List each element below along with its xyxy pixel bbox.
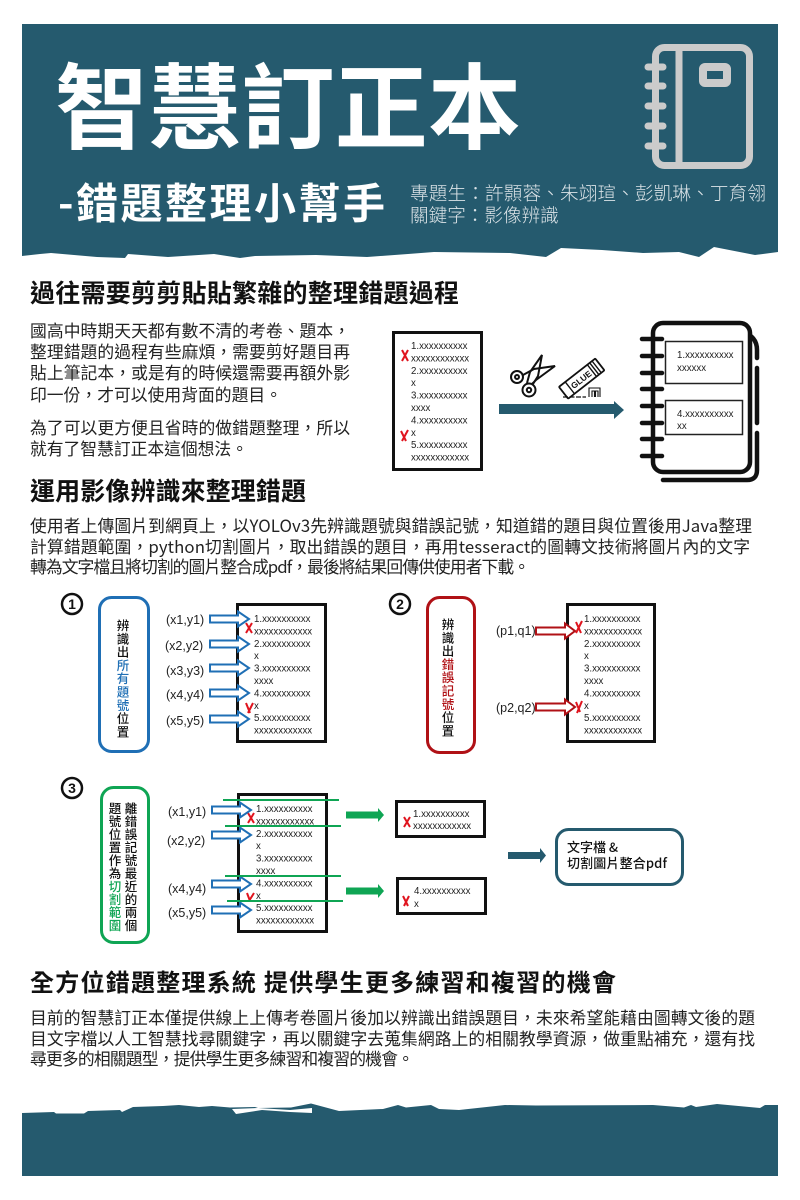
exam paper: 4.xxxxxxxxxx xyxy=(411,415,468,426)
text block: past process: 為了可以更方便且省時的做錯題整理，所以 xyxy=(30,415,350,439)
exam paper: xxxxxxxxxxxx xyxy=(584,726,642,737)
exam paper xyxy=(238,604,326,742)
text block: past process xyxy=(30,318,350,460)
exam paper: xxxxxxxxxxxx xyxy=(584,626,642,637)
exam paper: 1.xxxxxxxxxx xyxy=(254,614,311,625)
exam paper: x xyxy=(584,651,589,662)
text block: past process: 國高中時期天天都有數不清的考卷、題本， xyxy=(30,318,350,342)
label box: cropping range: 個 xyxy=(125,915,137,934)
step number 3 xyxy=(62,778,82,798)
label box: cropping range: 位 xyxy=(109,824,121,843)
step 2 xyxy=(390,594,654,752)
exam paper: 4.xxxxxxxxxx xyxy=(256,878,313,889)
label box: all question numbers: 識 xyxy=(117,628,129,647)
label box: cropping range: 置 xyxy=(109,837,121,856)
label box: cropping range: 離 xyxy=(125,798,138,817)
label box: cropping range: 題 xyxy=(109,798,122,817)
label box: error marks: 識 xyxy=(442,627,454,646)
label box: all question numbers: 所 xyxy=(117,655,130,674)
label box: all question numbers: 辨 xyxy=(117,615,130,634)
label box: all question numbers: 有 xyxy=(117,668,129,687)
exam paper: x xyxy=(256,891,261,902)
subtitle: -錯題整理小幫手 xyxy=(58,170,385,232)
icon: scissors xyxy=(511,355,555,396)
label box: cropping range: 作 xyxy=(109,850,122,869)
coordinate labels: (p2,q2) xyxy=(496,701,536,715)
green arrows xyxy=(346,808,384,898)
label box: all question numbers: 置 xyxy=(117,721,129,740)
coordinate labels: (x5,y5) xyxy=(166,714,204,728)
exam paper: 3.xxxxxxxxxx xyxy=(411,391,468,402)
cropped question 4 xyxy=(398,878,486,914)
label box: cropping range xyxy=(102,788,148,942)
heading: full system: 全方位錯題整理系統 提供學生更多練習和複習的機會 xyxy=(30,963,616,998)
exam paper: 1.xxxxxxxxxx xyxy=(584,614,641,625)
label box: error marks: 誤 xyxy=(442,667,455,686)
position arrows xyxy=(536,624,575,714)
icon: glue stick: GLUE xyxy=(569,368,594,391)
diagram: manual cut and paste xyxy=(394,323,757,480)
position arrows xyxy=(210,612,249,726)
cropped question 1: xxxxxxxxxxxx xyxy=(413,821,471,832)
footer banner xyxy=(22,1104,778,1176)
step number 2 xyxy=(390,594,410,614)
text block: image recognition xyxy=(30,513,752,578)
exam paper: x xyxy=(254,651,259,662)
exam paper: 5.xxxxxxxxxx xyxy=(584,713,641,724)
exam paper: 3.xxxxxxxxxx xyxy=(254,664,311,675)
dark arrow xyxy=(508,848,546,863)
exam paper: 5.xxxxxxxxxx xyxy=(411,440,468,451)
text block: future work: 目文字檔以人工智慧找尋關鍵字，再以關鍵字去蒐集網路上的相關教學資源，做重點補充，還有找 xyxy=(30,1026,755,1050)
label box: cropping range: 誤 xyxy=(125,824,138,843)
coordinate labels xyxy=(496,624,536,715)
label box: cropping range: 的 xyxy=(125,889,137,908)
label box: cropping range: 錯 xyxy=(125,811,137,830)
title: 智慧訂正本 xyxy=(55,34,521,168)
text block: past process: 印一份，才可以使用背面的題目。 xyxy=(30,382,282,406)
coordinate labels xyxy=(165,613,204,728)
text block: future work: 目前的智慧訂正本僅提供線上上傳考卷圖片後加以辨識出錯誤題目，未來希望能藉由圖轉文後的題 xyxy=(30,1005,755,1029)
coordinate labels: (x4,y4) xyxy=(168,882,206,896)
exam paper: 2.xxxxxxxxxx xyxy=(584,639,641,650)
text block: past process: 就有了智慧訂正本這個想法。 xyxy=(30,436,248,460)
exam paper: xxxx xyxy=(256,866,276,877)
error marks xyxy=(576,621,582,713)
text block: image recognition: 使用者上傳圖片到網頁上，以YOLOv3先辨識題號與錯誤記號，知道錯的題目與位置後用Java整理 xyxy=(30,513,752,537)
exam paper: 1.xxxxxxxxxx xyxy=(411,341,468,352)
label box: all question numbers: 位 xyxy=(117,708,129,727)
exam paper: xxxx xyxy=(411,403,431,414)
exam paper: xxxxxxxxxxxx xyxy=(256,916,314,927)
exam paper: 2.xxxxxxxxxx xyxy=(256,829,313,840)
project members and keywords: 專題生：許顥蓉、朱翊瑄、彭凱琳、丁育翎 xyxy=(410,179,766,206)
step 1 xyxy=(62,594,326,752)
label box: cropping range: 最 xyxy=(125,863,138,882)
project members and keywords: 關鍵字：影像辨識 xyxy=(410,201,559,228)
clipping 1 xyxy=(666,342,742,384)
label box: all question numbers xyxy=(100,598,148,752)
step number 1 xyxy=(62,594,82,614)
step number 1: 1 xyxy=(68,596,76,612)
exam paper: x xyxy=(411,378,416,389)
exam paper: x xyxy=(256,841,261,852)
exam paper: 5.xxxxxxxxxx xyxy=(256,903,313,914)
label box: cropping range: 範 xyxy=(109,902,122,921)
label box: cropping range: 號 xyxy=(109,811,122,830)
label box: all question numbers: 題 xyxy=(117,682,130,700)
coordinate labels: (x5,y5) xyxy=(168,906,206,920)
exam paper: x xyxy=(411,428,416,439)
label box: cropping range: 切 xyxy=(109,876,121,895)
exam paper: xxxxxxxxxxxx xyxy=(411,353,469,364)
exam paper: xxxxxxxxxxxx xyxy=(411,453,469,464)
label box: all question numbers: 號 xyxy=(117,695,130,714)
exam paper: 2.xxxxxxxxxx xyxy=(411,366,468,377)
arrow xyxy=(499,401,624,419)
cropped question 4: 4.xxxxxxxxxx xyxy=(414,886,471,897)
exam paper xyxy=(238,794,326,932)
project members and keywords xyxy=(410,179,766,228)
coordinate labels: (x2,y2) xyxy=(167,834,205,848)
coordinate labels: (x2,y2) xyxy=(165,639,203,653)
text block: past process: 貼上筆記本，或是有的時候還需要再額外影 xyxy=(30,360,350,384)
coordinate labels xyxy=(167,805,206,920)
label box: error marks: 辨 xyxy=(442,614,455,633)
output box: 切割圖片整合pdf xyxy=(567,853,668,872)
exam paper: 5.xxxxxxxxxx xyxy=(254,713,311,724)
exam paper: xxxxxxxxxxxx xyxy=(256,816,314,827)
text block: future work xyxy=(30,1005,755,1070)
exam paper: 2.xxxxxxxxxx xyxy=(254,639,311,650)
label box: cropping range: 割 xyxy=(109,889,121,908)
header banner xyxy=(22,24,778,258)
exam paper xyxy=(568,604,654,742)
cropped question 1 xyxy=(396,802,484,836)
exam paper: 3.xxxxxxxxxx xyxy=(256,854,313,865)
text block: future work: 尋更多的相關題型，提供學生更多練習和複習的機會。 xyxy=(30,1046,414,1070)
label box: error marks: 錯 xyxy=(442,654,454,673)
cropped question 1: 1.xxxxxxxxxx xyxy=(413,809,470,820)
heading: past process: 過往需要剪剪貼貼繁雜的整理錯題過程 xyxy=(30,274,459,310)
label box: cropping range: 為 xyxy=(109,863,121,882)
coordinate labels: (p1,q1) xyxy=(496,624,536,638)
text block: image recognition: 計算錯題範圍，python切割圖片，取出錯誤的題目，再用tesseract的圖轉文技術將圖片內的文字 xyxy=(30,534,750,558)
label box: error marks: 置 xyxy=(442,720,454,739)
exam paper: xxxxxxxxxxxx xyxy=(254,626,312,637)
step number 2: 2 xyxy=(396,596,404,612)
exam paper: x xyxy=(584,701,589,712)
exam paper xyxy=(394,332,482,470)
coordinate labels: (x3,y3) xyxy=(166,664,204,678)
cropped question 4: x xyxy=(414,899,419,910)
step number 3: 3 xyxy=(68,780,76,796)
label box: all question numbers: 出 xyxy=(117,642,129,661)
icon: notebook with clippings xyxy=(642,323,757,480)
output box: 文字檔 & xyxy=(567,837,618,856)
output box xyxy=(556,830,682,884)
exam paper: 3.xxxxxxxxxx xyxy=(584,664,641,675)
exam paper: 4.xxxxxxxxxx xyxy=(254,688,311,699)
label box: cropping range: 記 xyxy=(125,837,138,856)
exam paper: 1.xxxxxxxxxx xyxy=(256,804,313,815)
label box: error marks: 記 xyxy=(442,680,455,700)
text block: image recognition: 轉為文字檔且將切割的圖片整合成pdf，最後將結果回傳供使用者下載。 xyxy=(30,554,530,578)
label box: cropping range: 號 xyxy=(125,850,138,869)
position arrows xyxy=(212,802,251,918)
exam paper: xxxx xyxy=(584,676,604,687)
label box: cropping range: 圍 xyxy=(109,915,121,934)
step 3 xyxy=(62,778,682,942)
crop lines xyxy=(223,800,343,901)
clipping 1: 1.xxxxxxxxxx xyxy=(677,350,734,361)
icon: glue stick xyxy=(559,359,604,399)
heading: image recognition: 運用影像辨識來整理錯題 xyxy=(30,472,306,508)
exam paper: x xyxy=(254,701,259,712)
clipping 1: xxxxxx xyxy=(677,363,706,374)
label box: cropping range: 兩 xyxy=(125,902,137,921)
clipping 4 xyxy=(666,400,742,434)
label box: error marks: 號 xyxy=(442,694,455,713)
icon: notebook xyxy=(648,47,750,166)
coordinate labels: (x4,y4) xyxy=(166,688,204,702)
clipping 4: 4.xxxxxxxxxx xyxy=(677,409,734,420)
label box: cropping range: 近 xyxy=(125,876,138,895)
label box: error marks xyxy=(428,598,474,752)
label box: error marks: 位 xyxy=(442,707,454,726)
exam paper: xxxx xyxy=(254,676,274,687)
clipping 4: xx xyxy=(677,421,687,432)
exam paper: xxxxxxxxxxxx xyxy=(254,726,312,737)
exam paper: 4.xxxxxxxxxx xyxy=(584,688,641,699)
text block: past process: 整理錯題的過程有些麻煩，需要剪好題目再 xyxy=(30,339,350,363)
label box: error marks: 出 xyxy=(442,641,454,660)
coordinate labels: (x1,y1) xyxy=(168,805,206,819)
coordinate labels: (x1,y1) xyxy=(166,613,204,627)
